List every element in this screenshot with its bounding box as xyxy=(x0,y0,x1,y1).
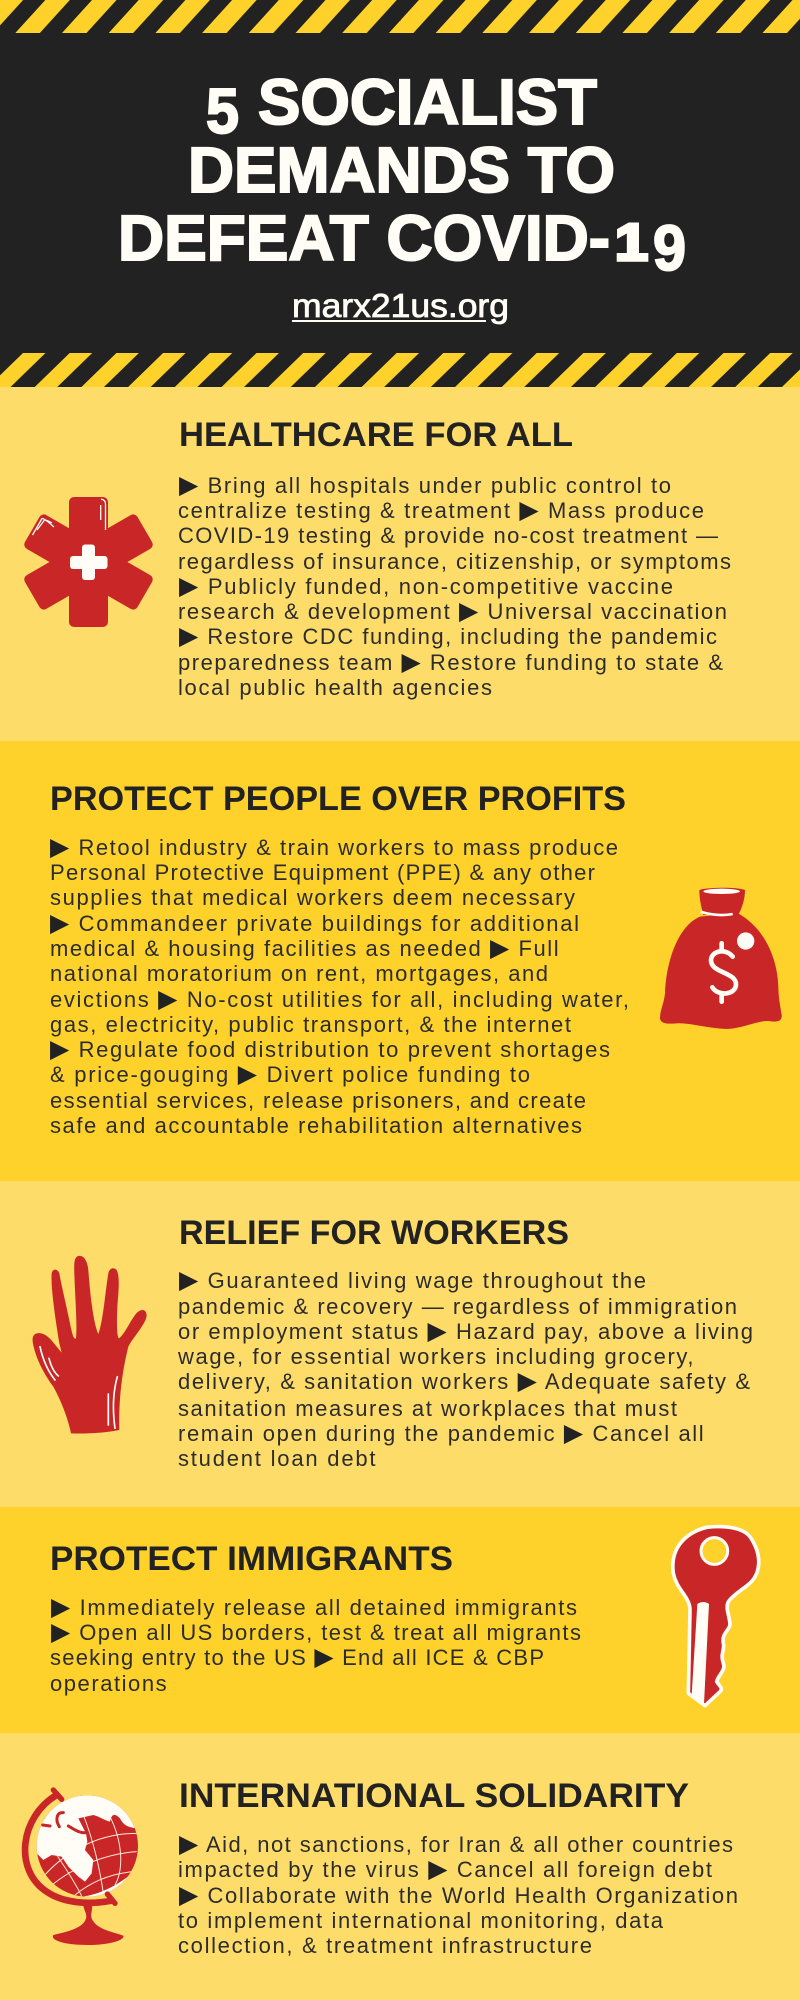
text block: protection demands: national moratorium on rent, mortgages, and xyxy=(50,961,548,986)
text block: worker demands xyxy=(177,1265,753,1471)
text block: protection demands: essential services, release prisoners, and create xyxy=(50,1088,586,1113)
text block: worker demands: sanitation measures at workplaces that must xyxy=(178,1396,677,1421)
icon: globe xyxy=(25,1790,140,1945)
text block: protection demands xyxy=(50,832,629,1138)
text block: worker demands: pandemic & recovery — regardless of immigration xyxy=(178,1294,737,1319)
text block: solidarity demands: ▶ Aid, not sanctions, for Iran & all other countries xyxy=(179,1829,733,1858)
icon: star of life xyxy=(22,497,155,627)
text block: protection demands: Personal Protective Equipment (PPE) & any other xyxy=(50,860,595,885)
hazard stripe: top xyxy=(0,0,800,33)
text block: solidarity demands: ▶ Collaborate with the World Health Organization xyxy=(179,1880,738,1909)
text block: healthcare demands: COVID-19 testing & provide no-cost treatment — xyxy=(178,523,718,548)
text block: solidarity demands: to implement international monitoring, data xyxy=(178,1908,664,1933)
text block: immigrant demands xyxy=(50,1592,581,1696)
text block: protection demands: medical & housing facilities as needed ▶ Full xyxy=(50,933,559,962)
text block: healthcare demands: centralize testing & treatment ▶ Mass produce xyxy=(178,495,704,524)
icon: gloved hand xyxy=(33,1256,147,1434)
text block: protection demands: ▶ Retool industry & train workers to mass produce xyxy=(50,832,618,861)
text block: healthcare demands: ▶ Restore CDC funding, including the pandemic xyxy=(179,621,717,650)
website link: marx21us.org xyxy=(292,287,509,324)
text block: protection demands: supplies that medical workers deem necessary xyxy=(50,885,575,910)
heading: protect immigrants: PROTECT IMMIGRANTS xyxy=(50,1540,453,1578)
text block: protection demands: ▶ Commandeer private buildings for additional xyxy=(50,908,579,937)
text block: worker demands: wage, for essential workers including grocery, xyxy=(177,1344,694,1369)
text block: healthcare demands: research & development ▶ Universal vaccination xyxy=(178,596,727,625)
text block: protection demands: & price-gouging ▶ Divert police funding to xyxy=(50,1059,530,1088)
text block: worker demands: remain open during the pandemic ▶ Cancel all xyxy=(178,1418,704,1447)
icon: money bag xyxy=(660,888,782,1029)
text block: healthcare demands: regardless of insurance, citizenship, or symptoms xyxy=(178,549,731,574)
heading: protect people over profits: PROTECT PEOPLE OVER PROFITS xyxy=(50,780,626,818)
title: SOCIALIST xyxy=(258,66,597,138)
panel: protect immigrants xyxy=(0,1507,800,1733)
panel: healthcare for all xyxy=(0,353,800,741)
text block: protection demands: gas, electricity, public transport, & the internet xyxy=(50,1012,571,1037)
text block: healthcare demands xyxy=(178,470,731,700)
title: 9 xyxy=(653,212,686,284)
text block: protection demands: ▶ Regulate food distribution to prevent shortages xyxy=(50,1034,610,1063)
panel: relief for workers xyxy=(0,1181,800,1507)
text block: healthcare demands: local public health agencies xyxy=(178,675,492,700)
text block: healthcare demands: preparedness team ▶ Restore funding to state & xyxy=(178,647,723,676)
text block: healthcare demands: ▶ Publicly funded, non-competitive vaccine xyxy=(179,571,673,600)
text block: worker demands: ▶ Guaranteed living wage throughout the xyxy=(179,1265,646,1294)
heading: international solidarity: INTERNATIONAL SOLIDARITY xyxy=(179,1777,689,1815)
text block: immigrant demands: ▶ Immediately release all detained immigrants xyxy=(51,1592,577,1621)
panel: protect people over profits xyxy=(0,741,800,1181)
icon: key xyxy=(673,1527,759,1706)
title: 1 xyxy=(615,214,648,272)
text block: protection demands: safe and accountable rehabilitation alternatives xyxy=(50,1113,582,1138)
hazard stripe: bottom xyxy=(0,353,800,387)
text block: solidarity demands xyxy=(178,1829,738,1958)
text block: protection demands: evictions ▶ No-cost utilities for all, including water, xyxy=(50,984,629,1013)
title xyxy=(118,66,686,284)
title: DEFEAT COVID- xyxy=(118,202,610,274)
text block: worker demands: or employment status ▶ Hazard pay, above a living xyxy=(178,1316,753,1345)
panel: international solidarity xyxy=(22,1783,737,1956)
title: 5 xyxy=(206,75,239,147)
text block: immigrant demands: seeking entry to the US ▶ End all ICE & CBP xyxy=(50,1642,544,1671)
text block: worker demands: student loan debt xyxy=(178,1446,376,1471)
heading: relief for workers: RELIEF FOR WORKERS xyxy=(179,1214,569,1252)
text block: immigrant demands: operations xyxy=(50,1671,167,1696)
text block: immigrant demands: ▶ Open all US borders, test & treat all migrants xyxy=(51,1617,581,1646)
heading: healthcare for all: HEALTHCARE FOR ALL xyxy=(179,416,573,454)
text block: solidarity demands: collection, & treatment infrastructure xyxy=(178,1933,592,1958)
text block: solidarity demands: impacted by the virus ▶ Cancel all foreign debt xyxy=(178,1854,712,1883)
header panel xyxy=(0,0,800,383)
text block: worker demands: delivery, & sanitation workers ▶ Adequate safety & xyxy=(178,1366,750,1395)
title: DEMANDS TO xyxy=(188,134,615,206)
text block: healthcare demands: ▶ Bring all hospitals under public control to xyxy=(179,470,671,499)
